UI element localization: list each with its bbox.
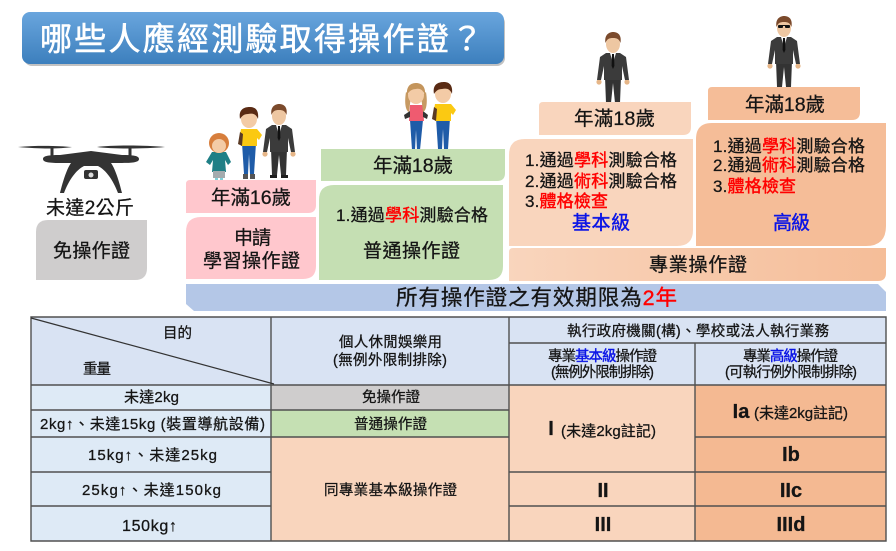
panel: advanced level: 高級 (773, 212, 810, 234)
table text (40, 322, 857, 535)
table text: 15kg↑、未達25kg (88, 447, 217, 464)
table grid lines (31, 317, 886, 541)
drone weight label: 未達2公斤 (46, 197, 134, 219)
class codes: Ib (782, 444, 800, 466)
panel: student certificate: 申請 (234, 227, 271, 249)
panel: general certificate: 1.通過學科測驗合格 (336, 206, 488, 225)
table text: 25kg↑、未達150kg (82, 482, 221, 499)
panel: basic level: 3.體格檢查 (525, 192, 608, 211)
table text: 專業高級操作證 (743, 348, 838, 365)
table text: 執行政府機關(構)、學校或法人執行業務 (567, 322, 830, 340)
panel: basic level: 1.通過學科測驗合格 (525, 151, 677, 170)
class codes: III (595, 514, 611, 536)
panel: advanced level (696, 123, 886, 246)
panel: age 16 (186, 180, 316, 213)
table: certificate by weight and purpose (31, 317, 886, 541)
table header backgrounds (31, 317, 886, 385)
panel: student certificate: 學習操作證 (203, 250, 300, 272)
panel: general certificate: 普通操作證 (363, 240, 460, 262)
table text: 普通操作證 (354, 416, 428, 433)
general row (271, 410, 509, 437)
banner: validity period: 所有操作證之有效期限為2年 (396, 286, 677, 310)
panel: professional certificate: 專業操作證 (649, 254, 747, 276)
table text: (無例外限制排除) (333, 352, 447, 369)
table text: 同專業基本級操作證 (324, 482, 458, 499)
panel: age 18 general: 年滿18歲 (373, 155, 453, 177)
panel: no certificate: 免操作證 (53, 240, 130, 262)
table text: 2kg↑、未達15kg (裝置導航設備) (40, 416, 265, 433)
table text: 專業基本級操作證 (548, 348, 658, 365)
class codes: IIc (780, 480, 802, 502)
table text: 150kg↑ (122, 518, 177, 535)
panel: general certificate (319, 185, 503, 280)
table text: 未達2kg (124, 389, 179, 406)
panel: age 18 advanced: 年滿18歲 (745, 94, 825, 116)
figure: advanced professional operator (767, 16, 801, 90)
class codes: II (597, 480, 609, 502)
panel: basic level: 基本級 (572, 212, 630, 234)
icon: drone (18, 146, 165, 193)
class codes: Ia (733, 401, 750, 423)
title (22, 12, 505, 66)
advanced level column (695, 385, 886, 541)
panel: advanced level: 3.體格檢查 (713, 177, 796, 196)
diagonal header divider (31, 318, 274, 384)
panel: no certificate (36, 220, 147, 280)
table text: (未達2kg註記) (561, 423, 656, 440)
panel: age 18 basic (539, 102, 691, 135)
table text: 個人休閒娛樂用 (339, 334, 442, 351)
weight column (31, 385, 271, 541)
table text: 免操作證 (362, 389, 420, 406)
figures: child, teen and adult (206, 104, 296, 185)
class codes: IIId (777, 514, 805, 536)
panel: advanced level: 2.通過術科測驗合格 (713, 156, 865, 175)
table text: 重量 (83, 361, 111, 378)
table text: 目的 (163, 325, 192, 342)
class codes (548, 401, 805, 536)
panel: basic level (509, 139, 693, 246)
figure: basic professional operator (596, 32, 630, 106)
table text: (可執行例外限制排除) (725, 364, 857, 381)
table text: (無例外限制排除) (551, 364, 654, 381)
table text: (未達2kg註記) (754, 405, 848, 422)
same as basic cell (271, 437, 509, 541)
panel: age 18 basic: 年滿18歲 (574, 108, 655, 130)
panel: age 18 advanced (708, 87, 860, 120)
panel: advanced level: 1.通過學科測驗合格 (713, 137, 865, 156)
basic level column (509, 385, 695, 541)
panel: professional certificate (509, 248, 886, 281)
panel: student certificate (186, 217, 316, 279)
panel: age 18 general (321, 149, 505, 181)
figures: teens (404, 82, 456, 155)
panel: basic level: 2.通過術科測驗合格 (525, 172, 677, 191)
banner: validity period (186, 284, 886, 311)
title: 哪些人應經測驗取得操作證？ (40, 21, 483, 57)
panel: age 16: 年滿16歲 (211, 187, 291, 209)
class codes: I (548, 418, 554, 440)
exempt row (271, 385, 509, 410)
